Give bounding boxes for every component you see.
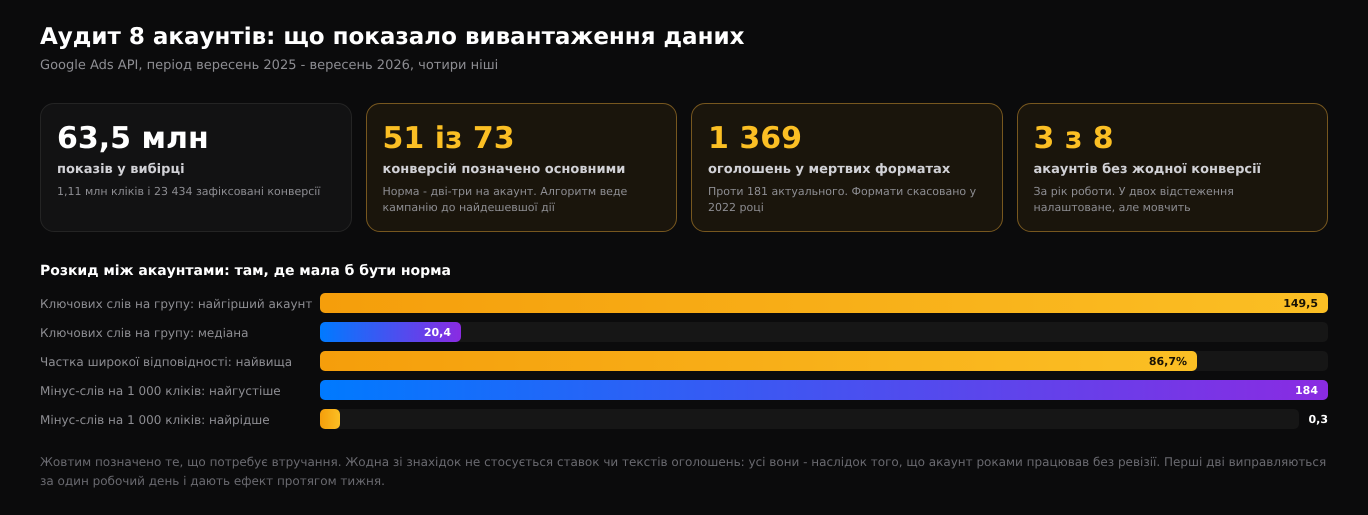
panel: accounts without conversions: За рік роботи. У двох відстеження <box>1034 185 1234 198</box>
panel: accounts without conversions <box>1016 103 1328 232</box>
panel: impressions: 63,5 млн <box>57 120 209 156</box>
row label: broad match share: Частка широкої відповідності: найвища <box>40 355 292 369</box>
bar: keywords worst: 149,5 <box>1283 297 1318 310</box>
title: Аудит 8 акаунтів: що показало вивантаження даних <box>40 24 744 50</box>
panel: impressions: показів у вибірці <box>57 162 185 177</box>
panel: primary conversions: конверсій позначено основними <box>382 162 625 177</box>
subtitle: Google Ads API, період вересень 2025 - вересень 2026, чотири ніші <box>40 58 498 73</box>
bar: broad match share <box>320 351 1328 371</box>
bar: keywords median: 20,4 <box>424 326 451 339</box>
footnote: за один робочий день і дають ефект протягом тижня. <box>40 474 385 488</box>
panel: primary conversions: кампанію до найдешевшої дії <box>382 201 555 214</box>
bar: negatives densest: 184 <box>1295 384 1318 397</box>
panel: accounts without conversions: 3 з 8 <box>1034 120 1114 156</box>
bar: keywords median <box>320 322 1328 342</box>
bar: keywords worst <box>320 293 1328 313</box>
section heading: Розкид між акаунтами: там, де мала б бути норма <box>40 262 451 278</box>
panel: impressions: 1,11 млн кліків і 23 434 зафіксовані конверсії <box>57 185 320 198</box>
panel: dead formats <box>691 103 1002 232</box>
panel: dead formats: оголошень у мертвих форматах <box>708 162 950 177</box>
row label: negatives sparsest: Мінус-слів на 1 000 кліків: найрідше <box>40 413 270 427</box>
bar: negatives sparsest <box>320 409 1299 429</box>
bar: broad match share: 86,7% <box>1149 355 1187 368</box>
panel: dead formats: 2022 році <box>708 201 764 214</box>
row label: negatives densest: Мінус-слів на 1 000 кліків: найгустіше <box>40 384 281 398</box>
panel: accounts without conversions: акаунтів без жодної конверсії <box>1034 162 1261 177</box>
panel: dead formats: Проти 181 актуального. Формати скасовано у <box>708 185 976 198</box>
panel: primary conversions <box>366 103 677 232</box>
row label: keywords median: Ключових слів на групу: медіана <box>40 326 248 340</box>
panel: primary conversions: Норма - дві-три на акаунт. Алгоритм веде <box>382 185 627 198</box>
bar: negatives densest <box>320 380 1328 400</box>
panel: accounts without conversions: налаштоване, але мовчить <box>1034 201 1191 214</box>
row label: keywords worst: Ключових слів на групу: найгірший акаунт <box>40 297 312 311</box>
panel: primary conversions: 51 із 73 <box>382 120 515 156</box>
panel: impressions <box>40 103 352 232</box>
footnote <box>40 455 1326 488</box>
value: negatives sparsest: 0,3 <box>1308 413 1328 426</box>
panel: dead formats: 1 369 <box>708 120 802 156</box>
footnote: Жовтим позначено те, що потребує втручання. Жодна зі знахідок не стосується ставок чи текстів оголошень: усі вони - наслідок того, що акаунт роками працював без ревізії. Перші дві виправляються <box>40 455 1326 469</box>
